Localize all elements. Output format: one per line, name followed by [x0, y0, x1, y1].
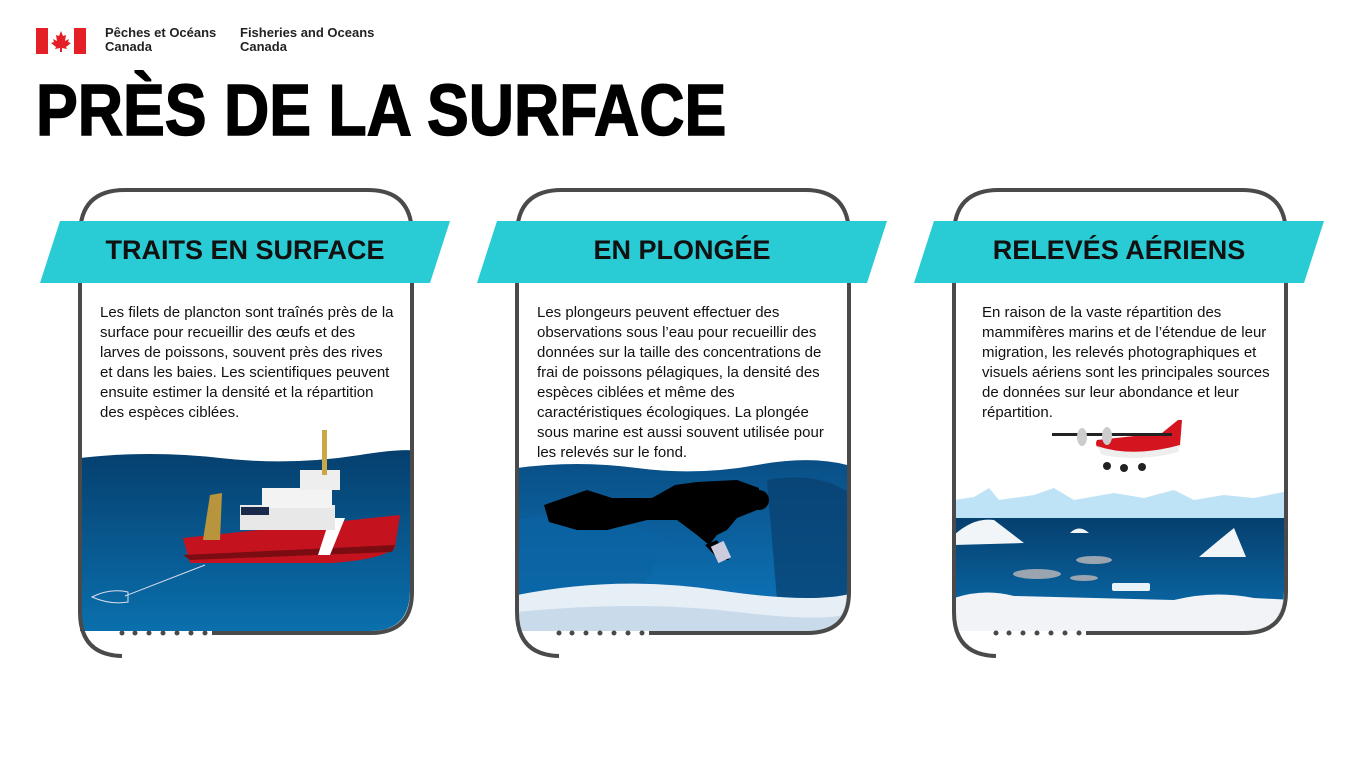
header: logo and department names: Canada: [240, 39, 287, 54]
airplane: [1052, 420, 1182, 472]
text block: Les filets de plancton sont traînés près de la surface pour recueillir des œufs et des larves de poissons, souvent près des rives et dans les baies. Les scientifiques peuvent ensuite estimer la densité et la répartition des espèces ciblées.: [100, 304, 394, 421]
image: diver scene: [517, 460, 857, 640]
heading: EN PLONGÉE: [593, 235, 771, 265]
banner: [477, 221, 887, 283]
banner: [40, 221, 450, 283]
frame: [80, 190, 412, 656]
icon: Canadian flag: [36, 28, 86, 54]
text: department names: Canada: [105, 39, 152, 54]
panel: relevés aériens: [914, 188, 1324, 658]
panel: en plongée: [477, 188, 887, 658]
image: arctic scene: [954, 488, 1294, 640]
diver silhouette: [544, 480, 759, 545]
image: ship scene: [80, 430, 421, 640]
text block: En raison de la vaste répartition des mammifères marins et de l’étendue de leur migration, les relevés photographiques et visuels aériens sont les principales sources de données sur leur abondance et leur répartition.: [982, 304, 1270, 421]
banner: [914, 221, 1324, 283]
text: department names: Pêches et Océans: [105, 25, 216, 40]
frame: [517, 190, 849, 656]
heading: RELEVÉS AÉRIENS: [993, 235, 1245, 265]
header: logo and department names: Fisheries and Oceans: [240, 25, 374, 40]
text: department names: [105, 25, 216, 54]
title: PRÈS DE LA SURFACE: [36, 71, 726, 151]
header: logo and department names: [36, 25, 374, 54]
panel: traits en surface: [40, 188, 450, 658]
frame: [954, 190, 1286, 656]
text block: Les plongeurs peuvent effectuer des observations sous l’eau pour recueillir des données sur la taille des concentrations de frai de poissons pélagiques, la densité des espèces ciblées et même des caractéristiques écologiques. La plongée sous marine est aussi souvent utilisée pour les relevés sur le fond.: [537, 304, 824, 461]
heading: TRAITS EN SURFACE: [105, 235, 385, 265]
